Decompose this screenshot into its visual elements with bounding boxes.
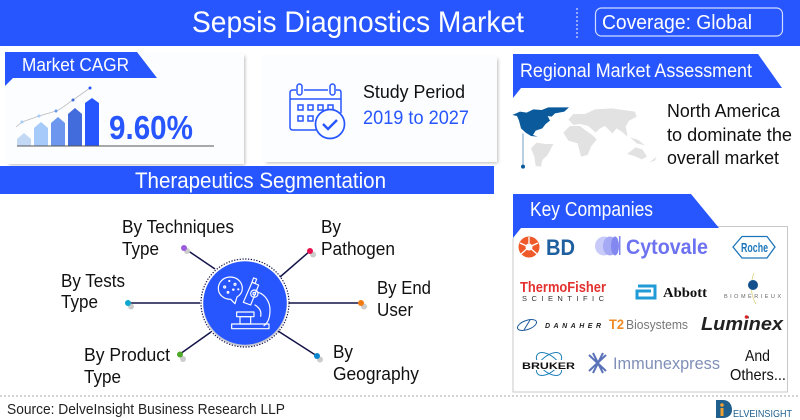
label: by tests type: Type [61, 291, 98, 312]
CAGR value: 9.60% [109, 109, 193, 146]
label: by pathogen: Pathogen [321, 238, 395, 259]
central hub [201, 259, 289, 347]
panel: therapeutics segmentation [0, 166, 494, 387]
label: by techniques type: By Techniques [122, 216, 234, 237]
label: by product type: By Product [84, 344, 170, 365]
label: by end user: User [377, 299, 413, 320]
and others note [730, 348, 786, 384]
logo: Thermo Fisher Scientific: ThermoFisher [520, 279, 606, 296]
panel: study period [262, 55, 498, 163]
logo: Bruker [522, 348, 576, 380]
logo: Bruker: BRUKER [522, 361, 575, 372]
ribbon: regional [513, 54, 782, 98]
ribbon: market CAGR: Market CAGR [22, 55, 129, 75]
label: by techniques type: Type [122, 238, 159, 259]
and others note: And [745, 348, 770, 365]
heading bar [0, 166, 494, 194]
logo: Danaher: DANAHER [545, 323, 601, 330]
logo: T2 Biosystems: Biosystems [626, 317, 688, 332]
header band [0, 0, 800, 46]
label: by geography: Geography [333, 363, 420, 384]
label: by end user: By End [377, 277, 431, 298]
logo: bioMerieux [724, 273, 781, 304]
regional text: to dominate the [667, 124, 792, 145]
chart: rising bars [16, 86, 214, 146]
logo: Immunexpress: Immunexpress [613, 355, 720, 373]
regional text: North America [667, 100, 781, 121]
regional text [667, 100, 792, 168]
logo: Cytovale [595, 236, 708, 259]
ribbon: key companies [513, 194, 719, 238]
spoke end dots [125, 245, 367, 362]
logo: BD [518, 235, 575, 260]
logo: Thermo Fisher Scientific [520, 279, 606, 303]
logo: Abbott: Abbott [663, 285, 708, 300]
ribbon: regional: Regional Market Assessment [520, 61, 753, 82]
coverage badge [596, 8, 782, 36]
logo: Danaher [516, 317, 601, 333]
logo: T2 Biosystems: T2 [609, 316, 624, 332]
label: by tests type [61, 270, 125, 312]
source note: Source: DelveInsight Business Research LLP [7, 401, 285, 418]
coverage badge: Coverage: Global [602, 12, 752, 34]
regional text: overall market [667, 147, 779, 168]
logo: Thermo Fisher Scientific: SCIENTIFIC [522, 294, 605, 303]
ribbon: key companies: Key Companies [530, 199, 653, 221]
ribbon: market CAGR [5, 52, 157, 86]
spokes [127, 248, 361, 356]
label: by end user [377, 277, 431, 320]
panel: key companies [513, 194, 788, 392]
logo: Roche: Roche [741, 240, 768, 255]
logo: BD: BD [546, 235, 575, 260]
title: Sepsis Diagnostics Market [192, 6, 525, 39]
label: by geography [333, 341, 420, 384]
logo: Roche [733, 236, 775, 258]
icon: calendar [290, 84, 344, 138]
label: by techniques type [122, 216, 234, 259]
icon: microscope and bacteria bubble [218, 277, 270, 329]
logo: Luminex: Luminex [701, 314, 784, 334]
study period text [363, 81, 469, 129]
label: by product type [84, 344, 170, 387]
label: by pathogen: By [321, 216, 342, 237]
logo: Abbott [637, 285, 708, 300]
panel: market CAGR [5, 52, 245, 165]
panel: regional market assessment [512, 54, 792, 169]
and others note: Others... [730, 367, 786, 384]
label: by geography: By [333, 341, 354, 362]
label: by pathogen [321, 216, 395, 259]
logo: DelveInsight [716, 400, 793, 420]
logo: DelveInsight: ELVEINSIGHT [733, 408, 793, 420]
study period text: 2019 to 2027 [363, 108, 469, 129]
world map [512, 107, 657, 169]
heading bar: Therapeutics Segmentation [135, 168, 386, 193]
logo: Cytovale: Cytovale [626, 236, 708, 259]
label: by tests type: By Tests [61, 270, 125, 291]
logo: bioMerieux: BIOMÉRIEUX [724, 293, 781, 300]
study period text: Study Period [363, 81, 465, 102]
label: by product type: Type [84, 366, 121, 387]
